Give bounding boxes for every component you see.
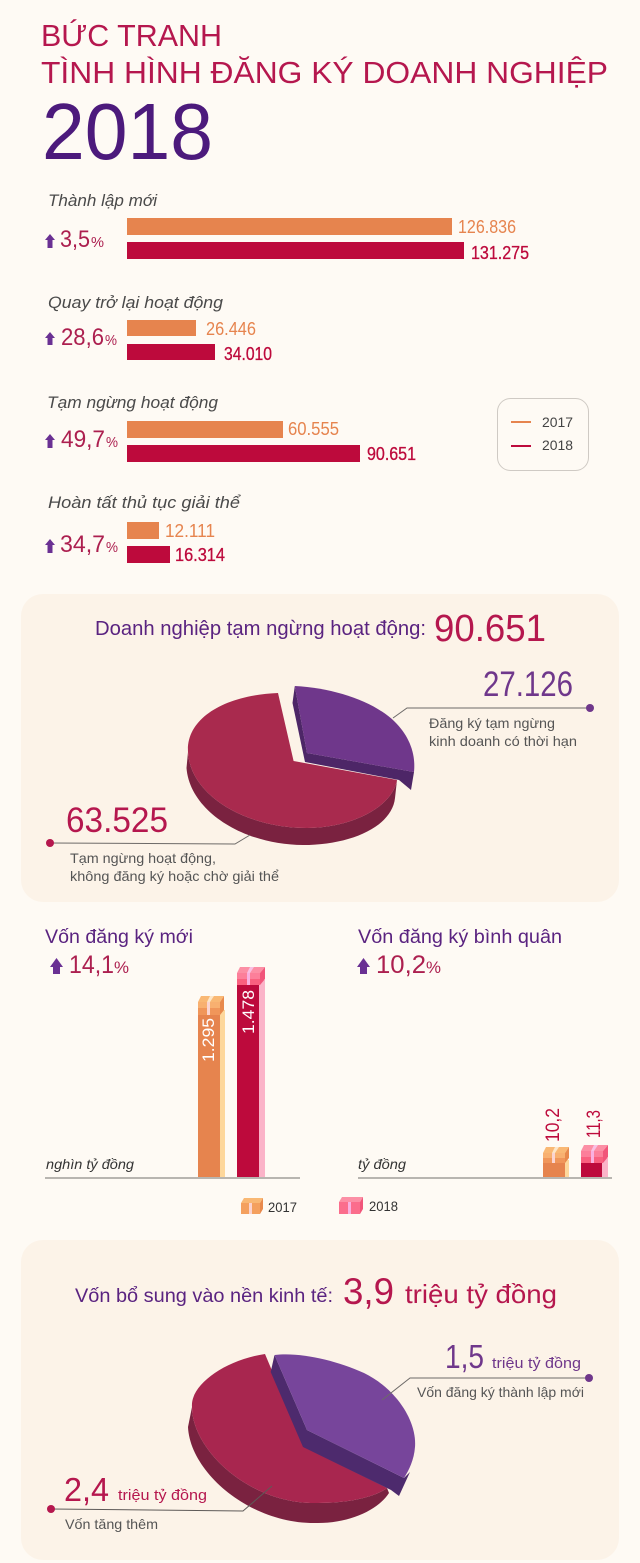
bar group: Thành lập mới: 131.275: [471, 243, 529, 263]
callout: 1,5 triệu tỷ đồng: triệu tỷ đồng: [492, 1355, 581, 1372]
chart: Vốn đăng ký mới: 14,1: [69, 951, 114, 979]
bar group: Hoàn tất thủ tục giải thể: 34,7: [60, 531, 105, 558]
panel: doanh nghiệp tạm ngừng hoạt động: [21, 594, 619, 902]
bar group: Quay trở lại hoạt động: Quay trở lại hoạt động: [48, 293, 224, 312]
bar 2018: [237, 967, 265, 1178]
bar group: Thành lập mới: 3,5: [60, 226, 90, 253]
chart: Vốn đăng ký mới: [45, 927, 300, 1179]
callout: 27.126: 27.126: [483, 665, 573, 704]
bar group: Thành lập mới: 126.836: [458, 217, 516, 237]
panel heading: [95, 608, 546, 650]
bar 2017: [543, 1108, 569, 1178]
pie chart: [188, 1354, 415, 1523]
bar group: Hoàn tất thủ tục giải thể: %: [106, 539, 118, 556]
chart: Vốn đăng ký bình quân: 10,2: [376, 951, 426, 979]
title: BỨC TRANH: [41, 18, 222, 53]
callout: 27.126: kinh doanh có thời hạn: [429, 733, 577, 749]
chart: Vốn đăng ký bình quân: [357, 927, 612, 1179]
callout: 1,5 triệu tỷ đồng: 1,5: [445, 1338, 484, 1375]
callout: 2,4 triệu tỷ đồng: triệu tỷ đồng: [118, 1487, 207, 1504]
bar group: Thành lập mới: %: [91, 234, 104, 251]
bar group: Thành lập mới: [45, 191, 529, 263]
chart: Vốn đăng ký bình quân: tỷ đồng: [358, 1156, 406, 1172]
callout: 1,5 triệu tỷ đồng: [382, 1338, 593, 1400]
title: [41, 18, 608, 176]
callout: 2,4 triệu tỷ đồng: Vốn tăng thêm: [65, 1516, 158, 1532]
callout: 2,4 triệu tỷ đồng: 2,4: [64, 1471, 109, 1508]
panel heading: Vốn bổ sung vào nền kinh tế:: [75, 1286, 333, 1307]
bar group: Quay trở lại hoạt động: %: [105, 332, 117, 349]
callout: 27.126: [393, 665, 594, 749]
legend: bar years: [498, 398, 588, 470]
chart: Vốn đăng ký mới: Vốn đăng ký mới: [45, 927, 193, 948]
bar group: Tạm ngừng hoạt động: 60.555: [288, 419, 339, 439]
bar group: Hoàn tất thủ tục giải thể: [45, 493, 242, 565]
bar 2017: 10,2: [543, 1108, 564, 1142]
bar group: Tạm ngừng hoạt động: Tạm ngừng hoạt động: [47, 393, 219, 412]
panel heading: triệu tỷ đồng: [405, 1279, 557, 1309]
panel: vốn bổ sung vào nền kinh tế: [21, 1240, 619, 1560]
title: TÌNH HÌNH ĐĂNG KÝ DOANH NGHIỆP: [41, 55, 608, 90]
callout: 63.525: 63.525: [66, 801, 168, 840]
legend: bar years: 2018: [542, 437, 573, 453]
legend: gift bars: [241, 1197, 398, 1215]
bar group: Tạm ngừng hoạt động: 90.651: [367, 444, 416, 464]
panel heading: [75, 1271, 557, 1312]
bar group: Quay trở lại hoạt động: 26.446: [206, 319, 256, 339]
bar group: Tạm ngừng hoạt động: %: [106, 434, 118, 451]
pie chart: [186, 686, 414, 845]
bar group: Quay trở lại hoạt động: 34.010: [224, 344, 272, 364]
panel heading: Doanh nghiệp tạm ngừng hoạt động:: [95, 618, 426, 640]
legend: bar years: 2017: [542, 414, 573, 430]
chart: Vốn đăng ký mới: nghìn tỷ đồng: [46, 1156, 134, 1172]
title: 2018: [42, 87, 213, 176]
callout: 1,5 triệu tỷ đồng: Vốn đăng ký thành lập mới: [417, 1384, 584, 1400]
bar group: Tạm ngừng hoạt động: [45, 393, 416, 464]
callout: 63.525: Tạm ngừng hoạt động,: [70, 850, 216, 866]
bar group: Tạm ngừng hoạt động: 49,7: [61, 426, 105, 453]
bar group: Quay trở lại hoạt động: 28,6: [61, 324, 104, 351]
panel heading: 3,9: [343, 1271, 394, 1312]
bar group: Quay trở lại hoạt động: [45, 293, 272, 364]
chart: Vốn đăng ký bình quân: %: [426, 958, 441, 977]
bar group: Hoàn tất thủ tục giải thể: Hoàn tất thủ tục giải thể: [48, 493, 242, 512]
bar 2017: 1.295: [199, 1018, 218, 1062]
chart: Vốn đăng ký bình quân: Vốn đăng ký bình quân: [358, 927, 562, 948]
chart: Vốn đăng ký mới: %: [114, 958, 129, 977]
bar 2018: [581, 1110, 608, 1178]
bar 2017: [198, 996, 225, 1178]
legend: gift bars: 2018: [369, 1198, 398, 1214]
bar group: Hoàn tất thủ tục giải thể: 12.111: [165, 521, 215, 541]
callout: 2,4 triệu tỷ đồng: [47, 1471, 272, 1532]
callout: 63.525: [46, 801, 279, 884]
legend: gift bars: 2017: [268, 1199, 297, 1215]
callout: 27.126: Đăng ký tạm ngừng: [429, 715, 555, 731]
panel heading: 90.651: [434, 608, 546, 650]
bar group: Hoàn tất thủ tục giải thể: 16.314: [175, 545, 225, 565]
bar 2018: 11,3: [584, 1110, 605, 1138]
bar 2018: 1.478: [239, 990, 258, 1034]
callout: 63.525: không đăng ký hoặc chờ giải thể: [70, 868, 279, 884]
bar group: Thành lập mới: Thành lập mới: [48, 191, 158, 210]
